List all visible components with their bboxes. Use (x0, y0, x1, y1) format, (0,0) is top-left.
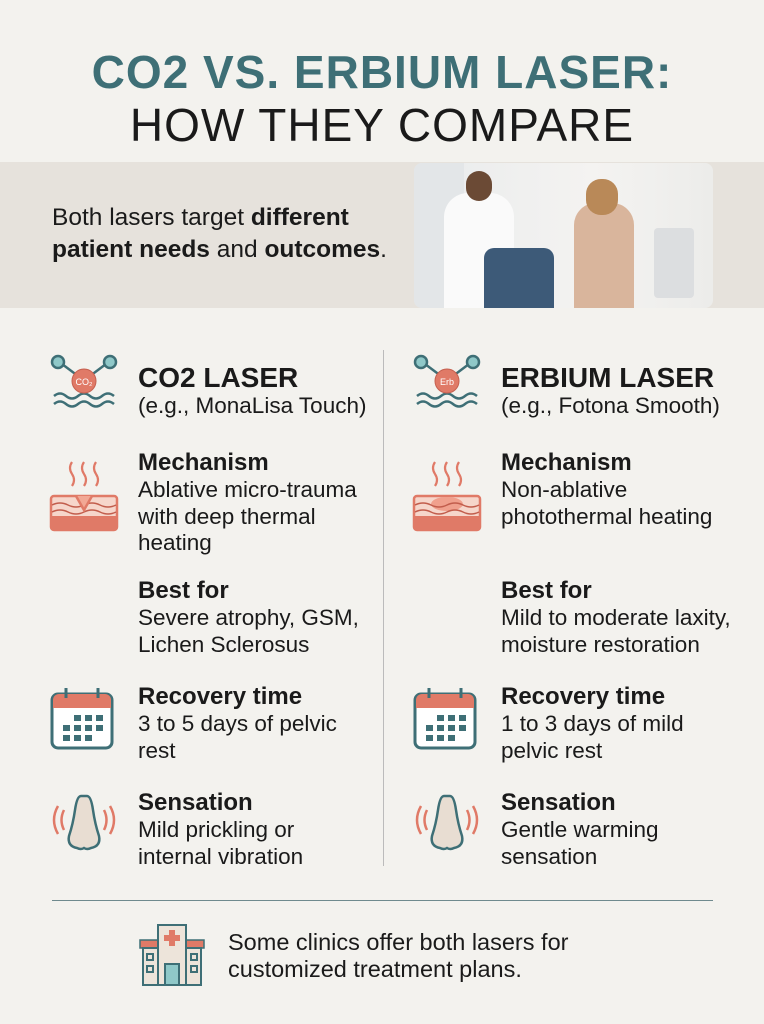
sensation: sensation (501, 844, 597, 868)
mechanism (138, 449, 357, 555)
recovery time: pelvic rest (501, 738, 602, 762)
heading: CO2 laser (138, 362, 366, 418)
recovery time: Recovery time (138, 683, 302, 710)
heading: CO2 laser: (e.g., MonaLisa Touch) (138, 393, 366, 418)
sensation: Gentle warming (501, 817, 659, 842)
icon: Erb molecule (414, 354, 480, 408)
icon: skin ablation (50, 461, 118, 532)
icon: calendar (414, 688, 476, 750)
sensation: Sensation (138, 789, 253, 816)
intro text: Both lasers target different (52, 204, 349, 231)
sensation (501, 789, 659, 868)
heading: Erbium laser: (e.g., Fotona Smooth) (501, 393, 720, 418)
footer text: customized treatment plans. (228, 956, 522, 982)
best for (501, 577, 731, 656)
sensation: Mild prickling or (138, 817, 294, 842)
footer text: Some clinics offer both lasers for (228, 929, 568, 955)
panel: Erbium laser (412, 354, 731, 868)
mechanism: Mechanism (138, 449, 269, 476)
best for: Mild to moderate laxity, (501, 605, 731, 630)
intro band (0, 162, 764, 308)
icon: nose sensation (416, 794, 478, 850)
footer (139, 924, 568, 986)
best for: Best for (138, 577, 229, 604)
recovery time (501, 683, 684, 762)
mechanism: heating (138, 530, 212, 555)
title: HOW THEY COMPARE (130, 99, 634, 151)
recovery time (138, 683, 337, 762)
panel: CO2 laser (50, 354, 366, 868)
mechanism: Non-ablative (501, 477, 627, 502)
title: CO2 VS. ERBIUM LASER: (92, 46, 672, 98)
intro text (52, 204, 387, 263)
heading: CO2 laser: CO2 LASER (138, 362, 298, 393)
heading: Erbium laser: ERBIUM LASER (501, 362, 714, 393)
mechanism: Mechanism (501, 449, 632, 476)
icon: CO2 molecule (50, 354, 118, 408)
mechanism (501, 449, 712, 528)
footer text (228, 929, 568, 982)
title (92, 46, 672, 151)
sensation: Sensation (501, 789, 616, 816)
best for (138, 577, 359, 656)
recovery time: Recovery time (501, 683, 665, 710)
best for: moisture restoration (501, 632, 700, 656)
best for: Lichen Sclerosus (138, 632, 309, 656)
icon: CO2 molecule: CO₂ (76, 377, 93, 387)
horizontal divider (52, 900, 713, 901)
mechanism: photothermal heating (501, 504, 712, 528)
sensation (138, 789, 303, 868)
intro text: patient needs and outcomes. (52, 236, 387, 263)
heading: Erbium laser (501, 362, 720, 418)
mechanism: with deep thermal (138, 504, 316, 528)
photo: doctor consultation (414, 163, 713, 308)
icon: calendar (50, 688, 114, 750)
mechanism: Ablative micro-trauma (138, 477, 357, 502)
vertical divider (383, 350, 384, 866)
sensation: internal vibration (138, 844, 303, 868)
icon: skin heating (412, 461, 482, 532)
recovery time: 1 to 3 days of mild (501, 711, 684, 736)
recovery time: rest (138, 738, 176, 762)
icon: Erb molecule: Erb (440, 377, 454, 387)
best for: Best for (501, 577, 592, 604)
best for: Severe atrophy, GSM, (138, 605, 359, 630)
icon: clinic (139, 924, 205, 986)
icon: nose sensation (52, 794, 116, 850)
recovery time: 3 to 5 days of pelvic (138, 711, 337, 736)
